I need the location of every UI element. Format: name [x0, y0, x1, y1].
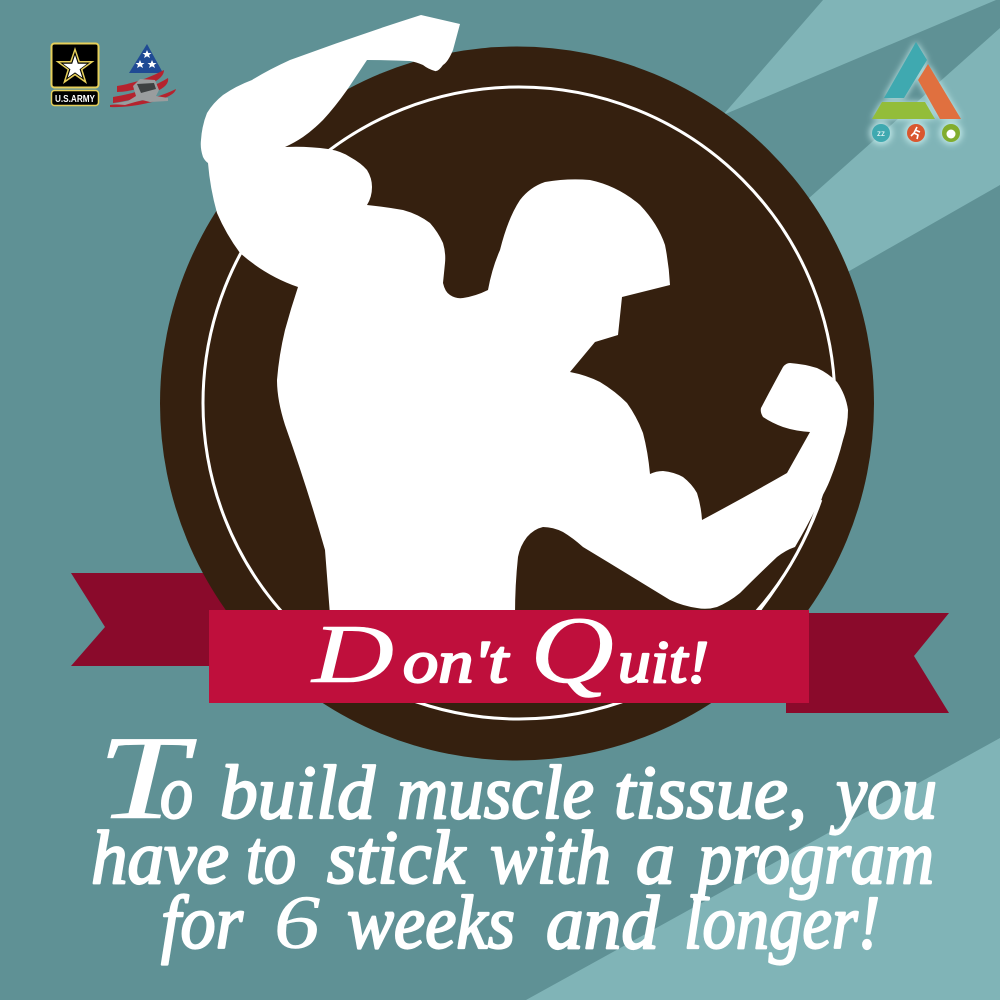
- main message text: build: [220, 751, 376, 835]
- main message text: stick: [327, 816, 466, 900]
- banner text: on't: [403, 629, 510, 695]
- nutrition sleep activity triangle logo: zz: [877, 129, 885, 138]
- flexing bodybuilder silhouette: [201, 15, 848, 615]
- flag triangle and soldier logo: [110, 44, 176, 107]
- nutrition sleep activity triangle logo: [870, 42, 962, 144]
- main message text: and: [546, 881, 660, 965]
- main message text: 6: [274, 881, 320, 965]
- back ribbon: left tail: [71, 573, 230, 666]
- main message text: o: [160, 751, 193, 835]
- banner text: D: [311, 608, 394, 701]
- U.S. Army logo: [52, 44, 98, 106]
- banner text: Q: [530, 597, 614, 703]
- banner text: uit!: [618, 629, 709, 695]
- main message text: program: [694, 816, 934, 900]
- front ribbon banner: [209, 610, 809, 703]
- thin ring sliver beside right arm: [760, 500, 821, 610]
- main message text: weeks: [347, 881, 515, 965]
- main message text: to: [246, 816, 296, 900]
- U.S. Army logo: U.S.ARMY: [55, 93, 95, 105]
- main message text: with: [490, 816, 611, 900]
- main message text: you: [830, 751, 937, 835]
- main message text: have: [91, 816, 229, 900]
- main message text: for: [161, 881, 243, 965]
- main message text: T: [97, 711, 197, 844]
- main message text: [91, 711, 937, 965]
- main message text: tissue,: [614, 751, 807, 835]
- main message text: longer!: [684, 881, 880, 965]
- back ribbon: right tail: [786, 613, 949, 713]
- brown badge circle: [160, 46, 874, 760]
- main message text: a: [636, 816, 675, 900]
- main message text: muscle: [397, 751, 594, 835]
